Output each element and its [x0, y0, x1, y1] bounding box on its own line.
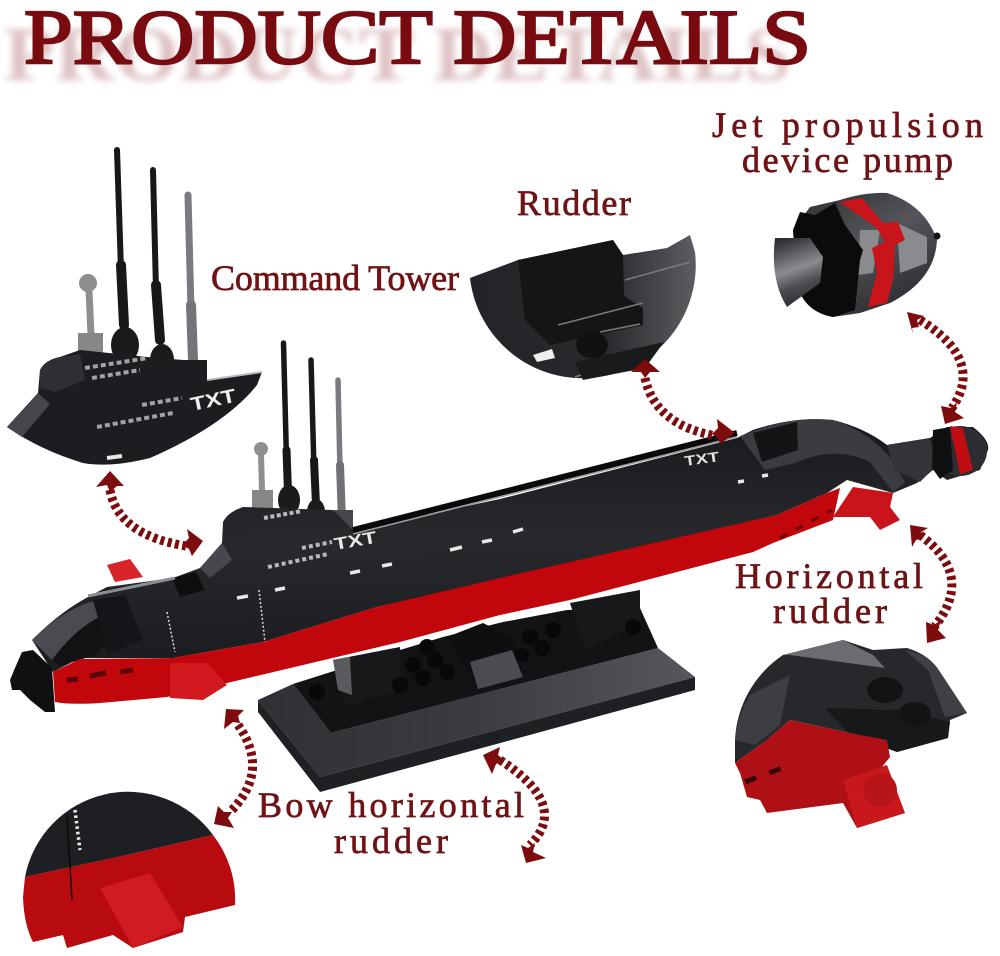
submarine: upper deck line	[353, 433, 737, 530]
submarine: red bow portholes	[67, 670, 133, 680]
submarine: nose cap	[10, 650, 55, 712]
rudder block	[518, 240, 643, 345]
main submarine model: TXT	[683, 448, 721, 469]
submarine: stern fairing	[740, 419, 987, 538]
label: bow horizontal rudder	[258, 785, 524, 861]
arrow: horizontal rudder	[910, 525, 952, 643]
arrow: display stand	[483, 747, 546, 863]
arrow: command tower	[96, 471, 203, 556]
label: jet propulsion device pump	[712, 105, 983, 180]
submarine: dark bow cap	[32, 543, 232, 666]
inset: command tower	[7, 150, 262, 465]
label: rudder: Rudder	[517, 183, 631, 223]
label: horizontal rudder: rudder	[773, 591, 887, 631]
pump: red band	[840, 198, 905, 307]
inset: rudder	[470, 235, 696, 380]
label: bow horizontal rudder: Bow horizontal	[258, 785, 524, 825]
label: jet propulsion device pump: device pump	[742, 140, 953, 180]
label: horizontal rudder: Horizontal	[735, 556, 923, 596]
label: command tower: Command Tower	[211, 258, 459, 298]
label: bow horizontal rudder: rudder	[334, 821, 448, 861]
submarine: mast antennas	[252, 343, 353, 536]
submarine: black hull	[32, 419, 988, 672]
inset: bow horizontal rudder	[23, 792, 235, 948]
horizontal rudder: red part	[735, 720, 905, 828]
arrow: rudder	[631, 359, 735, 444]
title: PRODUCT DETAILS	[4, 11, 791, 97]
submarine: TXT logo: TXT	[332, 528, 379, 554]
label: jet propulsion device pump: Jet propulsion	[712, 105, 983, 145]
inset: jet pump	[774, 193, 940, 317]
inset: horizontal rudder	[735, 640, 967, 828]
inset: TXT logo: TXT	[189, 386, 239, 416]
submarine: window markings	[167, 475, 768, 652]
submarine: rear rudder fin	[833, 487, 900, 530]
submarine: red flag fin	[107, 559, 143, 582]
submarine: red lower hull	[53, 488, 840, 704]
arrow: bow rudder	[214, 709, 253, 828]
main submarine model	[10, 343, 988, 712]
arrow: jet pump	[907, 312, 964, 424]
display stand	[258, 590, 695, 792]
label: horizontal rudder	[735, 556, 923, 631]
bow inset: red hull	[23, 835, 235, 948]
submarine: bow rudder	[170, 663, 227, 700]
